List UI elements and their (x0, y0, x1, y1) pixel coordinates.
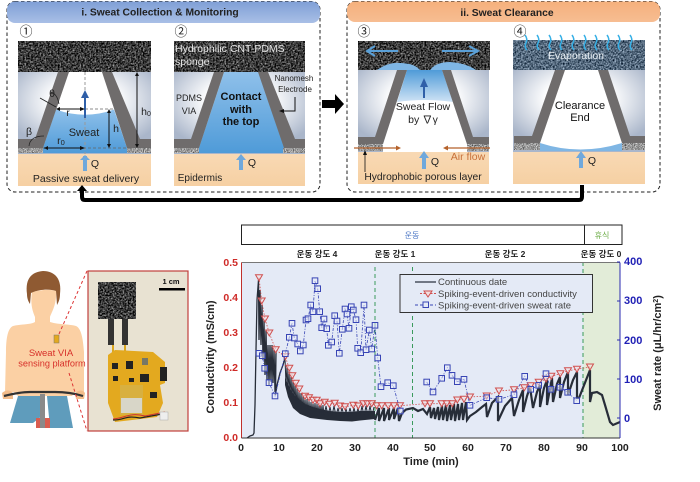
chart: conductivity and sweat rate over time (205, 256, 664, 468)
right axis labels: 100 (624, 374, 642, 386)
x axis title: Time (min) (403, 456, 459, 468)
left axis labels: 0.3 (223, 327, 238, 339)
right axis title: Sweat rate (μL/hr/cm (652, 303, 664, 411)
intensity labels: 운동 강도 1 (375, 249, 416, 259)
leads (111, 319, 125, 345)
cell 2: contact with the top: Electrode (278, 85, 312, 94)
panel: sweat collection and monitoring (7, 2, 320, 192)
axes (242, 262, 620, 264)
face and torso (5, 290, 84, 396)
sweat rate markers (259, 281, 400, 411)
cell 3: sweat flow: Sweat Flow (396, 101, 451, 113)
x axis labels: 60 (462, 442, 474, 454)
cell 1: passive sweat delivery: r (57, 135, 61, 147)
cell 3: sweat flow: Q (431, 156, 439, 168)
legend: Spiking-event-driven conductivity (438, 289, 577, 300)
x axis labels: 100 (611, 442, 629, 454)
photo: sensing device (88, 271, 188, 431)
left axis labels: 0.0 (223, 432, 238, 444)
legend: Continuous date (438, 277, 507, 288)
x axis labels: 30 (349, 442, 361, 454)
intensity labels: 운동 강도 0 (581, 249, 622, 259)
plot background (242, 262, 620, 438)
cell 2: contact with the top: PDMS (176, 93, 202, 103)
sponge (98, 282, 136, 319)
x axis labels: 20 (311, 442, 323, 454)
exercise timeline bar: 운동 (405, 231, 419, 240)
cell 4: clearance end: End (570, 112, 590, 124)
right axis labels: 0 (624, 413, 630, 425)
cell 4: clearance end: Evaporation (548, 50, 604, 62)
intensity labels (297, 249, 622, 259)
left axis labels: 0.2 (223, 362, 238, 374)
illustration: cyclist wearing patch (2, 271, 87, 431)
cell 2: contact with the top: Epidermis (178, 173, 222, 184)
cell 4: clearance end: Q (588, 155, 596, 167)
arrow: monitoring to clearance (322, 94, 344, 114)
right axis labels (624, 256, 642, 425)
right axis labels: 400 (624, 256, 642, 268)
x axis labels: 0 (238, 442, 244, 454)
cell 1: passive sweat delivery: h (141, 106, 147, 118)
hair (27, 271, 60, 305)
left axis title: Conductivity (mS/cm) (205, 300, 217, 414)
conductivity markers (259, 278, 590, 407)
icon: evaporation waves (525, 35, 632, 50)
cell 3: sweat flow: Air flow (451, 151, 486, 163)
x axis labels: 50 (424, 442, 436, 454)
handlebar (4, 392, 83, 396)
cell 1: passive sweat delivery: Sweat (69, 127, 99, 139)
cell 2: contact with the top: sponge (175, 56, 210, 68)
shorts (10, 396, 73, 428)
x axis labels: 10 (273, 442, 285, 454)
cell 2: contact with the top: with (229, 104, 252, 116)
cell 2: contact with the top: Q (248, 157, 256, 169)
callout line (59, 271, 87, 431)
cell 1: passive sweat delivery: r (66, 107, 70, 119)
cell 1: passive sweat delivery: h (113, 123, 119, 135)
cell 1: passive sweat delivery: Q (91, 158, 99, 170)
left axis labels (223, 257, 238, 444)
heading: sweat clearance: ii. Sweat Clearance (460, 8, 554, 19)
step 3 number: ③ (357, 24, 371, 39)
cell 1: passive sweat delivery: β (26, 126, 32, 138)
legend (400, 274, 592, 312)
cell 2: contact with the top: VIA (182, 106, 196, 116)
exercise timeline bar (242, 225, 622, 244)
cell 1: passive sweat delivery: Passive sweat delivery (33, 173, 140, 185)
panel: sweat clearance (347, 2, 660, 192)
x axis labels: 70 (500, 442, 512, 454)
wire (113, 413, 168, 420)
continuous data trace (247, 280, 620, 438)
left axis labels: 0.1 (223, 397, 238, 409)
scale bar: 1 cm (162, 277, 180, 286)
x axis labels: 90 (576, 442, 588, 454)
cell 2: contact with the top: the top (223, 116, 260, 128)
arrow: feedback loop to collection (82, 185, 582, 200)
heading: sweat collection (7, 2, 320, 23)
left axis labels: 0.4 (223, 292, 238, 304)
cell 1: passive sweat delivery: 0 (147, 111, 151, 118)
right axis title: ) (652, 295, 664, 299)
cell 1: passive sweat delivery: 0 (61, 138, 65, 147)
cell 2: contact with the top (174, 41, 313, 186)
right axis title: 2 (653, 299, 660, 303)
hands (2, 390, 85, 399)
cell 3: sweat flow (354, 41, 490, 184)
cell 1: passive sweat delivery: θ (49, 88, 55, 100)
illustration: cyclist wearing patch: Sweat VIA (29, 348, 74, 359)
cell 4: clearance end (513, 35, 645, 184)
exercise timeline bar: 휴식 (595, 231, 609, 240)
right axis labels: 200 (624, 335, 642, 347)
step 4 number: ④ (513, 24, 527, 39)
step 2 number: ② (174, 24, 188, 39)
saddle (36, 418, 50, 428)
intensity labels: 운동 강도 2 (485, 249, 526, 259)
cell 2: contact with the top: Nanomesh (275, 74, 313, 83)
legend: Spiking-event-driven sweat rate (438, 300, 571, 312)
components (112, 358, 167, 398)
heading: sweat collection: i. Sweat Collection & Monitoring (81, 8, 239, 18)
cell 3: sweat flow: Hydrophobic porous layer (364, 172, 482, 183)
right axis labels: 300 (624, 295, 642, 307)
battery (120, 385, 143, 415)
cell 2: contact with the top: Contact (221, 91, 262, 103)
left axis labels: 0.5 (223, 257, 238, 269)
circuit board (108, 350, 165, 422)
x axis labels: 80 (538, 442, 550, 454)
step 1 number: ① (19, 24, 33, 39)
x axis labels: 40 (387, 442, 399, 454)
heading: sweat clearance (347, 2, 660, 22)
cell 2: contact with the top: Hydrophilic CNT-PDMS (175, 43, 285, 55)
cell 1: passive sweat delivery (18, 41, 151, 186)
cell 4: clearance end: Clearance (555, 100, 605, 112)
connector (160, 412, 168, 420)
cell 3: sweat flow: by ∇γ (408, 114, 439, 126)
illustration: cyclist wearing patch: sensing platform (18, 358, 86, 368)
patch icon (54, 335, 59, 343)
x axis labels (238, 442, 629, 454)
intensity labels: 운동 강도 4 (297, 249, 338, 259)
